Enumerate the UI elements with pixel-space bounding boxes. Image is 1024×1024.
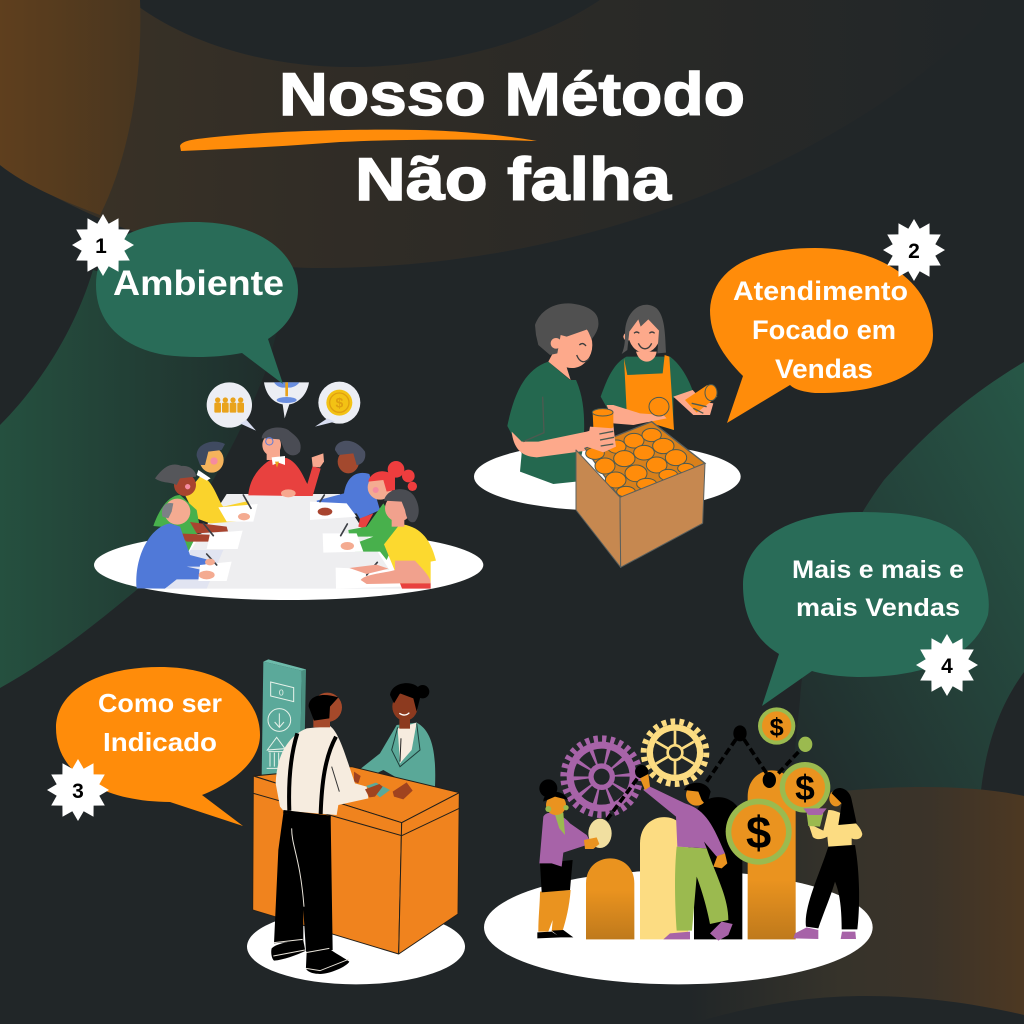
- gear: purple: [564, 739, 640, 815]
- coin: top: [758, 707, 795, 745]
- speech bubble 2: Atendimento Focado em Vendas: [710, 248, 933, 423]
- person: man in blue (right): [317, 441, 380, 528]
- title brush stroke: [180, 130, 537, 151]
- orange counter: [253, 767, 459, 954]
- badge 1: [72, 214, 134, 276]
- speech bubble 2: Atendimento Focado em Vendas: Focado em: [752, 315, 896, 345]
- badge 3: 3: [72, 780, 84, 803]
- coin: medium: $: [795, 769, 815, 808]
- coin: medium: [780, 762, 830, 813]
- scene 2: people and box of cans: [474, 303, 741, 567]
- background blob: right green: [790, 362, 1024, 800]
- white floor ellipse: [484, 870, 873, 984]
- white floor ellipse: [474, 443, 741, 511]
- title: [180, 61, 745, 213]
- gear: yellow: [644, 721, 706, 784]
- speech bubble 2: Atendimento Focado em Vendas: Vendas: [775, 354, 873, 384]
- person: man in green shirt: [507, 303, 615, 484]
- scene 4: growth chart with gears: [484, 707, 873, 984]
- scene 3: bank counter: [247, 659, 465, 984]
- badge 4: [916, 634, 978, 696]
- growth bars: [586, 770, 796, 939]
- pens and hands: [199, 495, 377, 579]
- bank panel: [262, 659, 306, 777]
- cardboard box: [576, 450, 705, 567]
- person: woman with apron: [601, 305, 717, 430]
- title line 2: Não falha: [355, 146, 672, 213]
- speech bubble 1: Ambiente: Ambiente: [113, 264, 284, 303]
- white floor ellipse: [247, 909, 465, 984]
- badge 2: 2: [908, 240, 920, 263]
- speech icon: coin: $: [335, 395, 343, 411]
- speech bubble 2: Atendimento Focado em Vendas: Atendimento: [733, 276, 908, 306]
- coin: large: $: [746, 807, 771, 858]
- white floor ellipse: [94, 530, 483, 600]
- speech bubble 3: Como ser Indicado: [56, 667, 260, 826]
- speech bubble 3: Como ser Indicado: Como ser: [98, 688, 222, 718]
- papers on table: [198, 502, 402, 589]
- person: woman in purple jacket: [537, 779, 612, 938]
- badge 4: 4: [941, 655, 953, 678]
- person: woman in yellow blouse: [793, 788, 862, 939]
- background blob: bottom-right brown: [690, 787, 1024, 1024]
- person: man reaching: [640, 774, 733, 941]
- person: man in yellow: [185, 442, 250, 523]
- background blob: top brown: [0, 0, 1000, 268]
- speech bubble 4: Mais e mais e mais Vendas: [743, 512, 989, 706]
- meeting table: [166, 494, 402, 589]
- person: woman in red: [248, 427, 324, 497]
- dashed trend line: [607, 733, 805, 820]
- hand with can: [587, 409, 616, 452]
- background blob: top-left brown: [0, 0, 140, 215]
- speech icon: tree: [264, 382, 309, 418]
- background blob: left green: [0, 270, 280, 688]
- scene 1: meeting table: [94, 382, 483, 600]
- teller hands and money: [354, 772, 413, 799]
- speech icon: coin: [315, 382, 360, 427]
- person: teller woman: [354, 683, 435, 787]
- person: man with suspenders: [271, 693, 383, 974]
- person: girl with red hair: [348, 461, 417, 560]
- coin: top: $: [770, 713, 784, 741]
- cans held: [649, 385, 717, 416]
- speech bubble 4: Mais e mais e mais Vendas: Mais e mais e: [792, 556, 964, 584]
- speech bubble 4: Mais e mais e mais Vendas: mais Vendas: [796, 594, 960, 622]
- bank panel: 0: [279, 687, 284, 697]
- badge 3: [47, 759, 109, 821]
- coin: large: [726, 799, 792, 865]
- badge 2: [883, 219, 945, 281]
- badge 1: 1: [95, 235, 107, 258]
- speech icon: people: [207, 382, 256, 431]
- person: front girl in yellow: [349, 489, 436, 589]
- speech bubble 1: Ambiente: [96, 222, 298, 384]
- person: old man in blue: [136, 499, 214, 589]
- trend points: [635, 725, 812, 788]
- box contents: cans: [585, 422, 705, 498]
- speech bubble 3: Como ser Indicado: Indicado: [103, 727, 217, 757]
- person: woman in green: [153, 464, 228, 555]
- title line 1: Nosso Método: [279, 61, 745, 128]
